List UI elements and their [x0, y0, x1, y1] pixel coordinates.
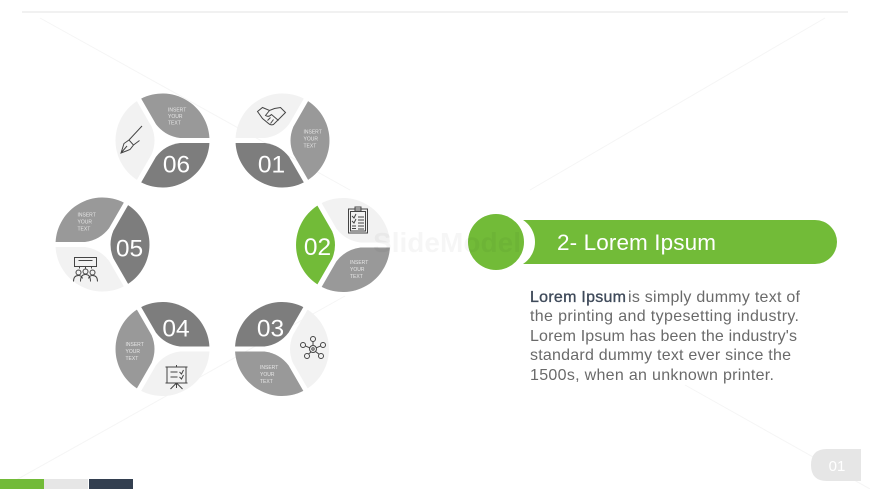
number 05: 05 — [116, 236, 143, 262]
label: insert your text: TEXT — [260, 379, 273, 385]
description text: standard dummy text ever since the — [530, 347, 791, 364]
label: insert your text — [350, 260, 368, 280]
petal: icon background — [116, 101, 154, 180]
label: insert your text — [168, 108, 186, 126]
icon: presentation board — [166, 365, 188, 389]
number 04: 04 — [162, 316, 190, 342]
petal: insert text — [313, 232, 401, 305]
cycle unit 01 — [225, 80, 329, 201]
number 06: 06 — [163, 152, 190, 178]
description text: the printing and typesetting industry. — [530, 308, 799, 325]
label: insert your text: INSERT — [126, 342, 144, 348]
label: insert your text: TEXT — [350, 274, 363, 280]
petal: insert text — [45, 184, 133, 257]
petal: number — [225, 128, 313, 201]
label: insert your text: YOUR — [126, 349, 140, 355]
number 03: 03 — [257, 316, 284, 342]
petal: insert text — [116, 310, 154, 388]
label: insert your text — [260, 365, 278, 385]
page number badge: 01 — [829, 458, 845, 475]
icon: audience and screen — [74, 258, 98, 282]
label: insert your text: INSERT — [350, 260, 368, 266]
label: insert your text: INSERT — [168, 108, 186, 114]
label: insert your text: YOUR — [168, 114, 183, 120]
description text — [530, 289, 801, 384]
page number badge — [811, 449, 861, 481]
label: insert your text: TEXT — [304, 144, 316, 150]
banner title: 2- Lorem Ipsum — [557, 230, 716, 255]
petal: icon background — [45, 232, 133, 305]
cycle unit 04 — [116, 289, 220, 409]
petal: insert text — [132, 80, 220, 153]
petal: icon background — [132, 336, 220, 409]
green circle marker — [468, 214, 524, 270]
petal: insert text — [290, 101, 329, 180]
cycle unit 03 — [224, 289, 329, 409]
petal: number — [110, 205, 149, 284]
description text: 1500s, when an unknown printer. — [530, 367, 774, 384]
petal: icon background — [313, 185, 401, 258]
label: insert your text — [126, 342, 144, 362]
icon: clipboard checklist — [348, 207, 368, 233]
petal: number — [132, 128, 220, 201]
description text: is simply dummy text of — [628, 289, 801, 306]
label: insert your text: TEXT — [168, 120, 181, 126]
title banner — [468, 214, 837, 270]
cycle unit 05 — [45, 184, 149, 305]
label: insert your text: INSERT — [304, 130, 322, 136]
label: insert your text: YOUR — [304, 136, 318, 142]
icon: network hub — [300, 336, 326, 358]
label: insert your text — [304, 130, 322, 150]
number 02: 02 — [304, 234, 331, 261]
description text: Lorem Ipsum has been the industry's — [530, 328, 797, 345]
icon: handshake — [258, 108, 286, 125]
watermark: SlideModel — [373, 227, 521, 258]
description text: Lorem Ipsum — [530, 289, 626, 306]
number 01: 01 — [258, 152, 285, 178]
label: insert your text: INSERT — [260, 365, 278, 371]
label: insert your text: TEXT — [78, 226, 90, 232]
label: insert your text: YOUR — [350, 267, 365, 273]
icon: fountain pen — [121, 126, 142, 153]
petal: icon background — [290, 310, 329, 388]
label: insert your text: YOUR — [260, 372, 275, 378]
label: insert your text: TEXT — [126, 356, 138, 362]
petal: icon background — [225, 80, 313, 153]
label: insert your text — [78, 212, 96, 232]
petal: number green — [296, 206, 335, 284]
cycle unit 06 — [116, 80, 220, 201]
footer colour blocks — [0, 479, 133, 489]
label: insert your text: INSERT — [78, 212, 96, 218]
petal: number — [132, 289, 220, 362]
label: insert your text: YOUR — [78, 220, 92, 226]
petal: insert text — [224, 336, 312, 409]
petal: number — [224, 289, 312, 362]
cycle unit 02 (active) — [296, 185, 401, 305]
